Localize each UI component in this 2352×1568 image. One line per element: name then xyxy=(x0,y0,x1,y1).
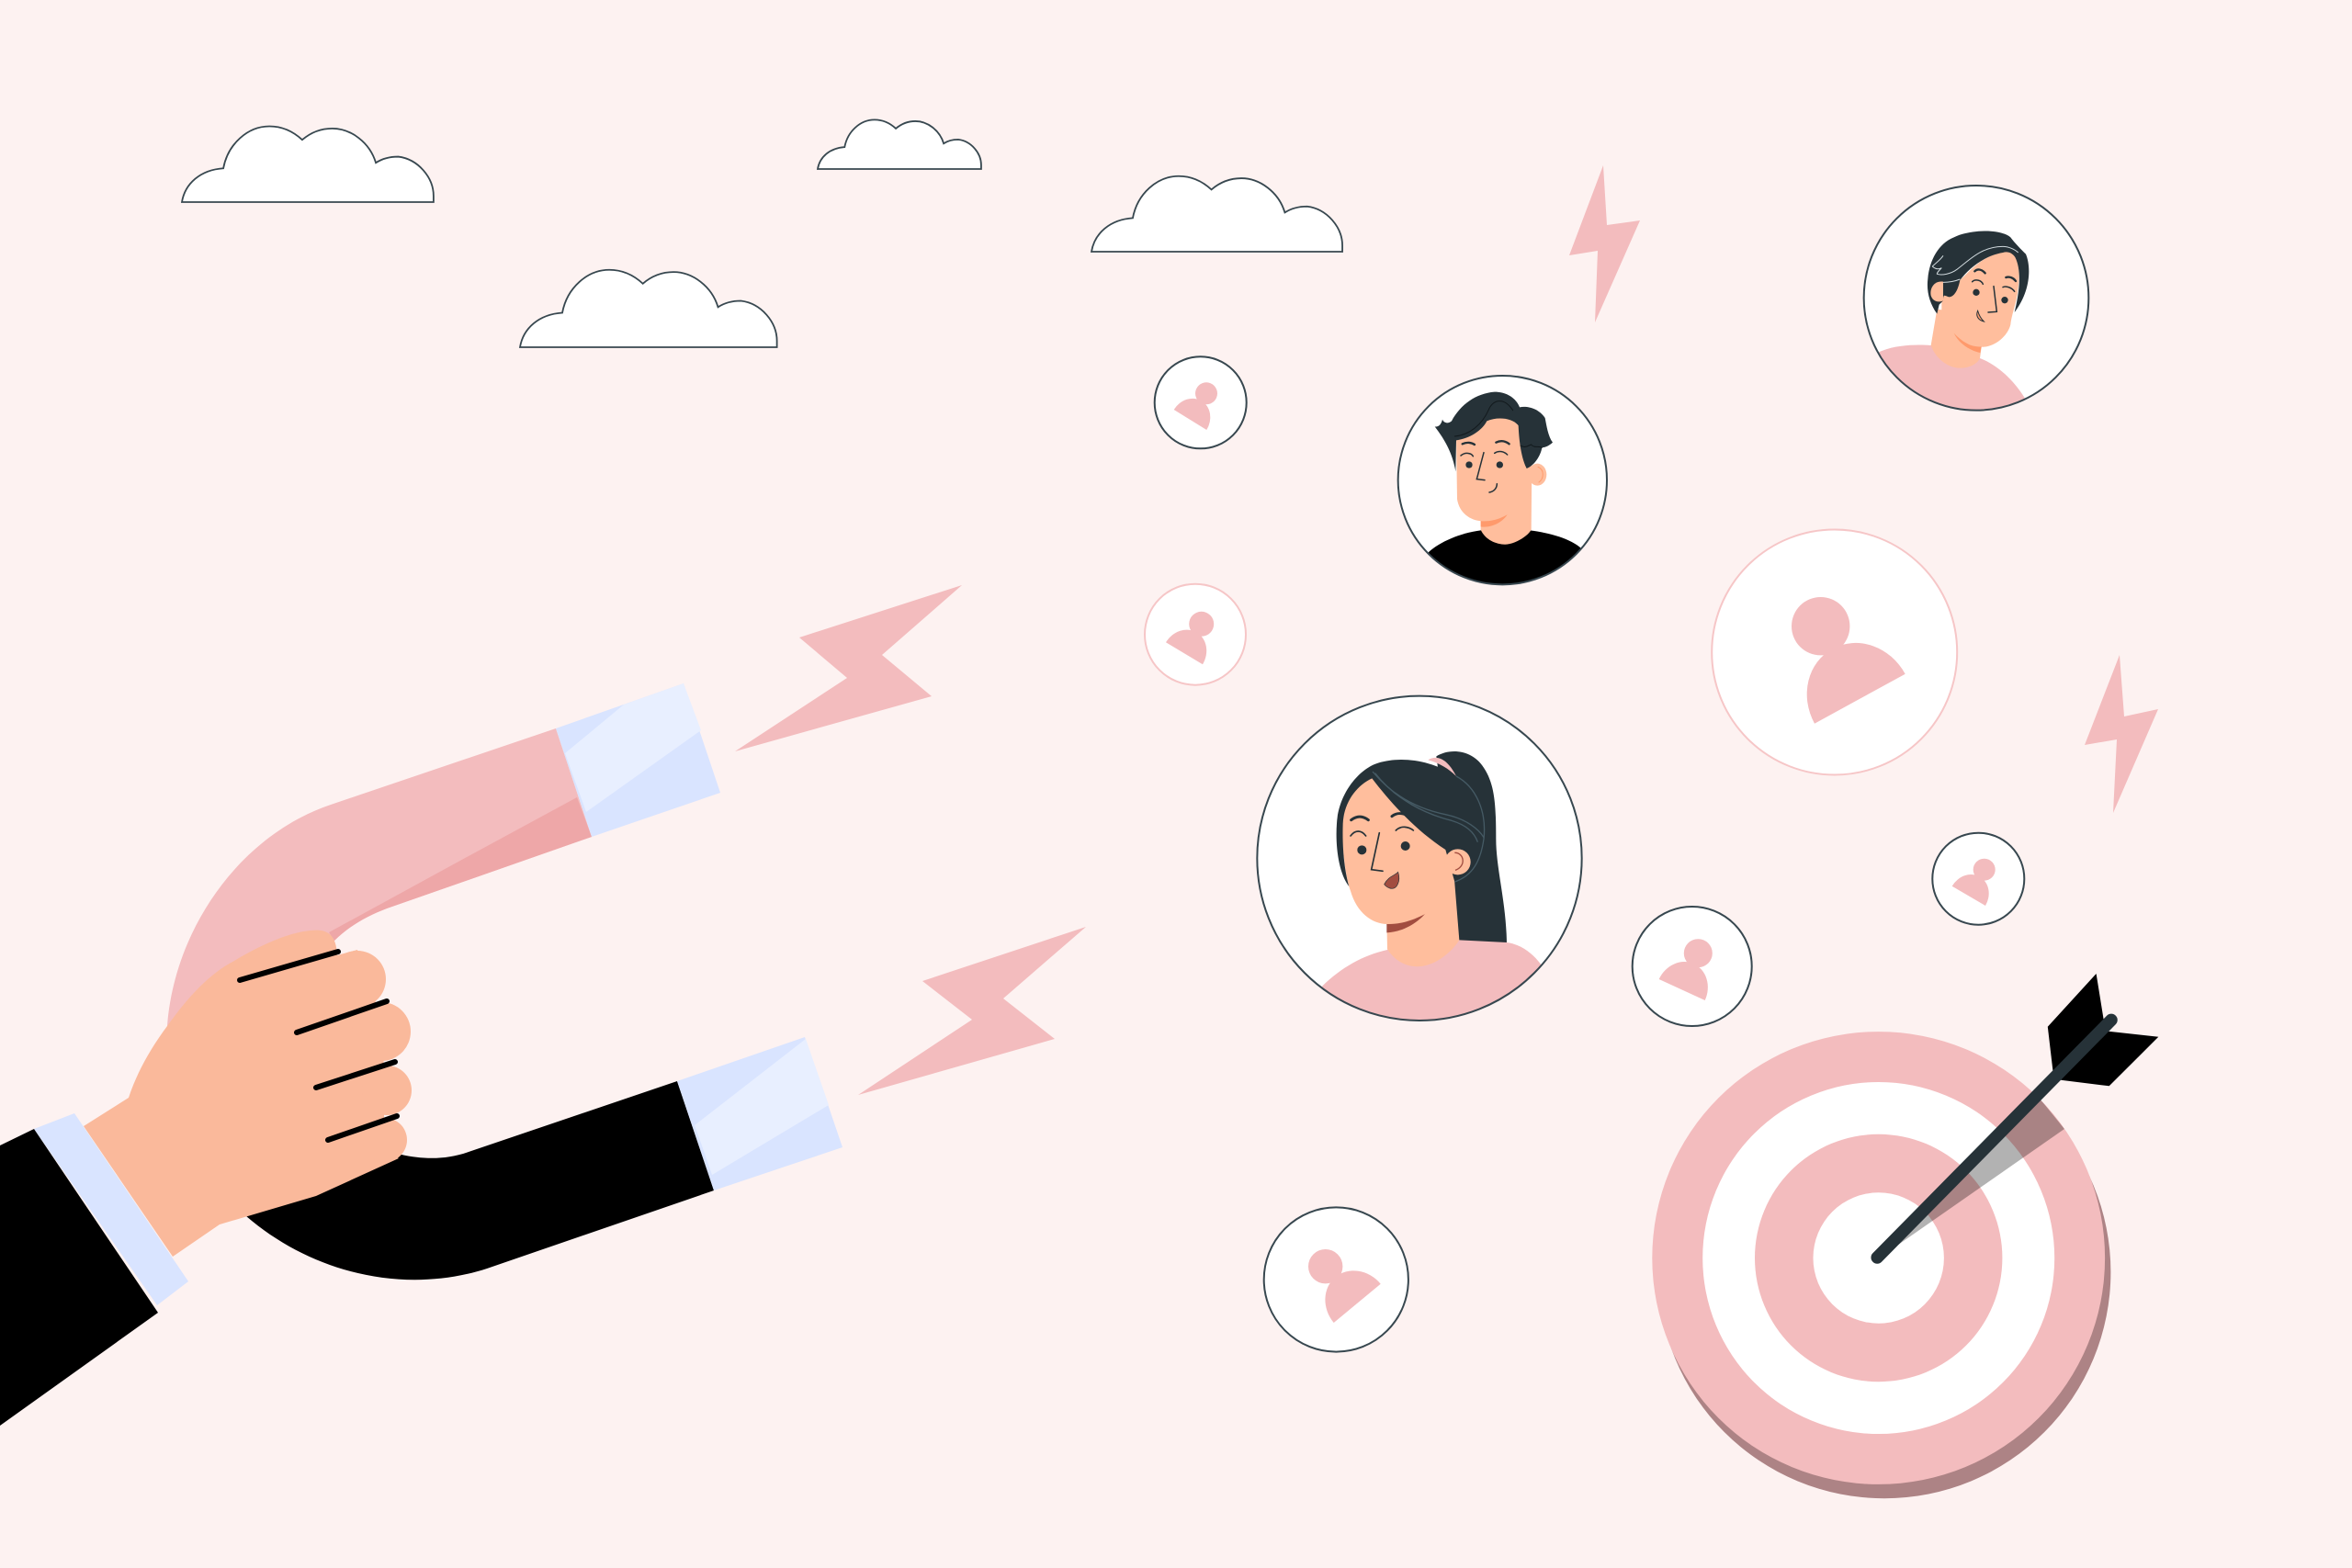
man 2: pink shirt xyxy=(1879,345,2025,410)
hand: finger 1 xyxy=(329,951,386,1008)
man 2: face xyxy=(1941,251,2019,347)
hand: finger 3 xyxy=(362,1066,412,1115)
cloud 2 xyxy=(818,119,981,169)
lightning bolt: right xyxy=(2085,655,2158,813)
woman: sweater xyxy=(1322,940,1542,1020)
magnet: upper tip xyxy=(556,683,720,837)
hand: finger 4 xyxy=(363,1118,407,1162)
magnet xyxy=(167,683,842,1280)
magnet: lower tip xyxy=(677,1037,842,1190)
man 2: face details xyxy=(1973,269,2016,312)
woman: hair xyxy=(1336,760,1455,886)
woman: face xyxy=(1342,774,1454,924)
hand: palm xyxy=(84,931,399,1257)
hand: finger 2 xyxy=(352,1002,411,1061)
cloud 3 xyxy=(1091,176,1342,252)
portrait: man in black shirt xyxy=(1396,375,1608,586)
arrow flight: lower xyxy=(2061,1031,2158,1086)
magnet: pink arm shading xyxy=(329,797,592,941)
woman: hair strands xyxy=(1373,772,1485,882)
avatar icon E xyxy=(1264,1207,1408,1352)
hand gripping the magnet xyxy=(84,931,412,1257)
man 1: face details xyxy=(1454,401,1543,492)
lightning bolt: upper magnet pole xyxy=(735,585,962,751)
avatar icon B xyxy=(1145,584,1246,685)
man 2: neck shadow xyxy=(1954,333,1982,353)
target with arrow xyxy=(1652,974,2158,1498)
target: bullseye xyxy=(1814,1192,1944,1324)
suit sleeve xyxy=(0,1129,158,1426)
portrait: man in pink shirt xyxy=(1864,186,2088,420)
arrow shaft xyxy=(1877,1020,2111,1258)
man 2: hair xyxy=(1928,231,2029,314)
man 2: ear xyxy=(1930,281,1943,301)
man 2: hair highlight xyxy=(1932,246,2018,282)
man 1: face xyxy=(1456,419,1523,522)
avatar icon A xyxy=(1155,356,1247,448)
target: outer pink ring xyxy=(1652,1032,2105,1484)
man 1: neck shadow xyxy=(1481,514,1507,527)
lightning bolt: top centre xyxy=(1569,165,1640,322)
woman: neck xyxy=(1386,875,1459,966)
portrait: woman with ponytail xyxy=(1257,696,1582,1047)
avatar icon C xyxy=(1633,907,1752,1026)
man 2: neck xyxy=(1931,310,1982,368)
lightning bolt: lower magnet pole xyxy=(858,927,1086,1095)
shirt cuff xyxy=(34,1113,188,1305)
magnet: pink arm xyxy=(167,728,592,1029)
cloud 4 xyxy=(520,270,777,347)
target: inner pink ring xyxy=(1755,1134,2002,1382)
avatar icon F xyxy=(1712,529,1957,775)
man 1: neck xyxy=(1481,459,1532,545)
avatar icon D xyxy=(1932,833,2024,925)
woman: ponytail xyxy=(1436,751,1507,946)
cloud 1 xyxy=(182,127,434,202)
target: drop shadow xyxy=(1658,1045,2110,1498)
woman: neck shadow xyxy=(1386,914,1425,933)
woman: eyes and brows xyxy=(1351,814,1413,871)
arrow flight: upper xyxy=(2048,974,2104,1071)
target: white ring xyxy=(1702,1082,2054,1434)
woman: mouth xyxy=(1385,872,1399,888)
man 2: smile xyxy=(1977,310,1984,321)
woman: hair tie xyxy=(1428,758,1456,776)
man 1: hair xyxy=(1435,392,1553,471)
man 1: ear xyxy=(1532,463,1547,486)
woman: ear xyxy=(1445,849,1471,874)
hand: finger lines xyxy=(240,952,397,1140)
magnet: black arm xyxy=(246,1081,714,1280)
arrow shadow xyxy=(1883,1100,2064,1256)
man 1: black shirt xyxy=(1428,530,1580,584)
